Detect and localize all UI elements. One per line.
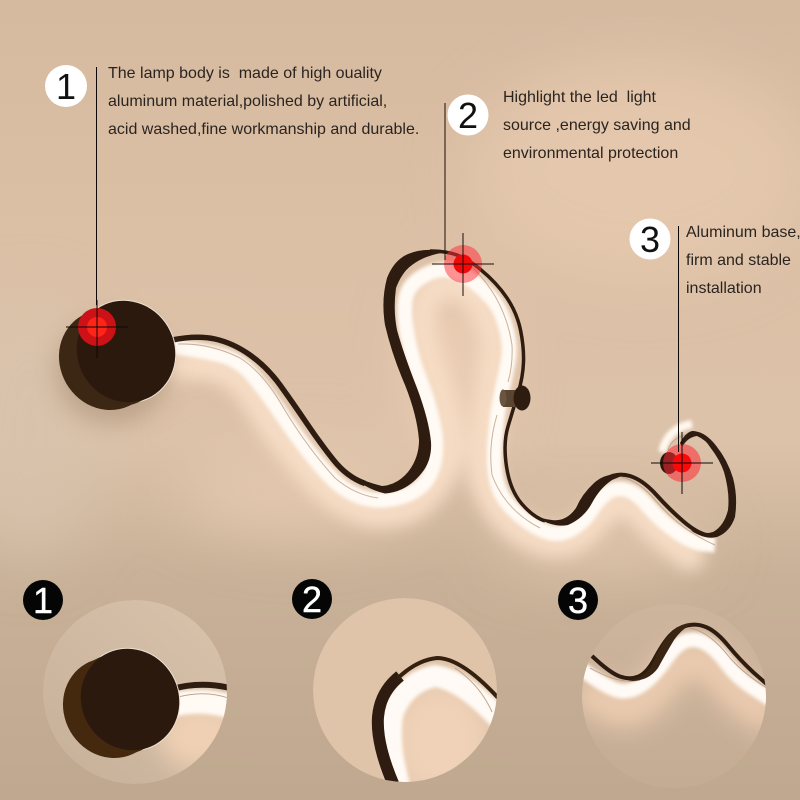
callout 2 text [503,89,691,162]
base side [41,288,184,428]
lamp dark metal strip [172,250,736,538]
badge 2 white: 2 [458,95,478,136]
detail 2 white band [391,676,505,795]
badge 3 black: 3 [568,580,588,621]
marker 1 red target with leader line [66,67,128,358]
detail 1 glow [154,713,224,772]
badge 3 white: 3 [640,219,660,260]
detail 1 base rim [98,648,180,750]
badge 2 white [448,94,488,136]
detail 3 glow [580,658,775,720]
marker 2 red target with leader line [432,103,494,296]
detail 1 white band [165,702,235,708]
badge 2 black [292,579,332,620]
detail 1 strip [172,685,230,689]
callout 3 text: Aluminum base, [686,224,800,241]
detail 3 white band [580,640,775,702]
detail 1 base side [62,656,145,758]
badge 1 white [45,65,87,107]
base rim highlight [57,281,195,422]
wall light wash [0,60,800,573]
lamp joint knob [500,386,530,410]
detail 3 strip [592,625,770,687]
callout 3 text: installation [686,280,762,297]
base front face [58,283,194,420]
detail 1 base face [80,648,180,750]
badge 2 black: 2 [302,579,322,620]
lamp: curved LED strip with glow [172,250,736,555]
callout 1 text: The lamp body is made of high ouality [108,65,382,82]
lamp white light band [173,270,715,545]
lamp strip end cap [660,452,678,474]
detail 3 strip thick part [628,623,692,681]
callout 2 text: source ,energy saving and [503,117,691,134]
detail 2 thin strip [398,658,500,700]
badge 3 black [558,580,598,621]
lamp glow [178,284,690,555]
callout 2 text: Highlight the led light [503,89,657,106]
callout 3 text [686,224,800,297]
callout 2 text: environmental protection [503,145,678,162]
callout 3 text: firm and stable [686,252,791,269]
callout 1 text: aluminum material,polished by artificial, [108,93,387,110]
lamp reflected lines [178,265,715,545]
marker 3 red target with leader line [651,226,713,494]
detail circle 1: wall base close-up [43,600,242,784]
detail 1 thin line [178,694,228,698]
callout 1 text: acid washed,fine workmanship and durable. [108,121,419,138]
badge 1 white: 1 [56,66,76,107]
detail 3 thin line [590,628,770,690]
detail 2 thick strip [378,676,400,788]
base shadow [56,320,168,424]
badge 3 white [630,218,670,260]
lamp round base [41,281,195,428]
badge 1 black [23,580,63,621]
detail 2 thin line [455,668,492,712]
detail circle 2: LED curve close-up [313,598,497,782]
detail circle 3: wave close-up [582,620,766,743]
badge 1 black: 1 [33,580,53,621]
detail 2 glow [402,689,490,782]
callout 1 text [108,65,419,138]
